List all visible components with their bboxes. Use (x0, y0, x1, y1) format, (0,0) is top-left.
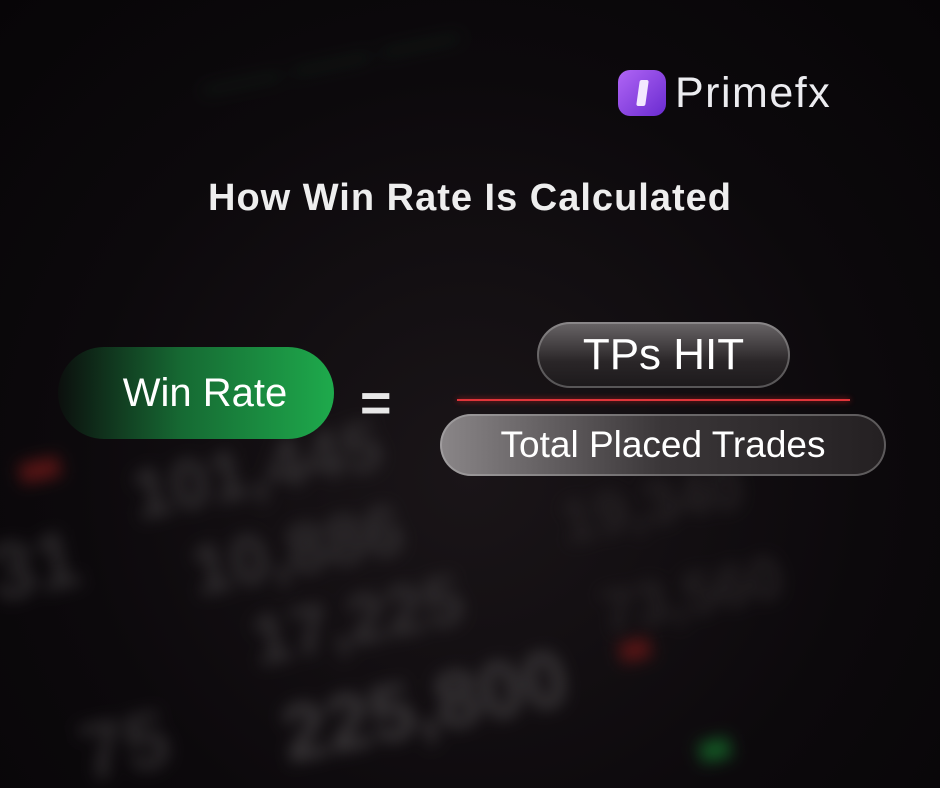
pill: win rate (58, 347, 334, 439)
text: 10,886 (184, 490, 410, 610)
logo text: Primefx (675, 69, 831, 117)
icon: candle logo (618, 70, 666, 116)
title: How Win Rate Is Calculated (208, 177, 732, 219)
text: 73,560 (595, 543, 788, 646)
pill: TPs HIT (537, 322, 790, 388)
pill: TPs HIT: TPs HIT (583, 330, 744, 379)
logo (618, 69, 831, 117)
text: 17,225 (244, 560, 470, 680)
pill: win rate: Win Rate (123, 370, 287, 414)
red fraction line (457, 399, 850, 401)
pill: total placed trades (440, 414, 886, 476)
equals sign: = (360, 373, 392, 433)
text: 19,340 (555, 453, 748, 556)
text: 225,800 (274, 632, 575, 779)
text: —— —— —— (198, 13, 464, 111)
pill: total placed trades: Total Placed Trades (501, 424, 825, 465)
text: 101,445 (125, 406, 388, 534)
formula (60, 322, 886, 476)
